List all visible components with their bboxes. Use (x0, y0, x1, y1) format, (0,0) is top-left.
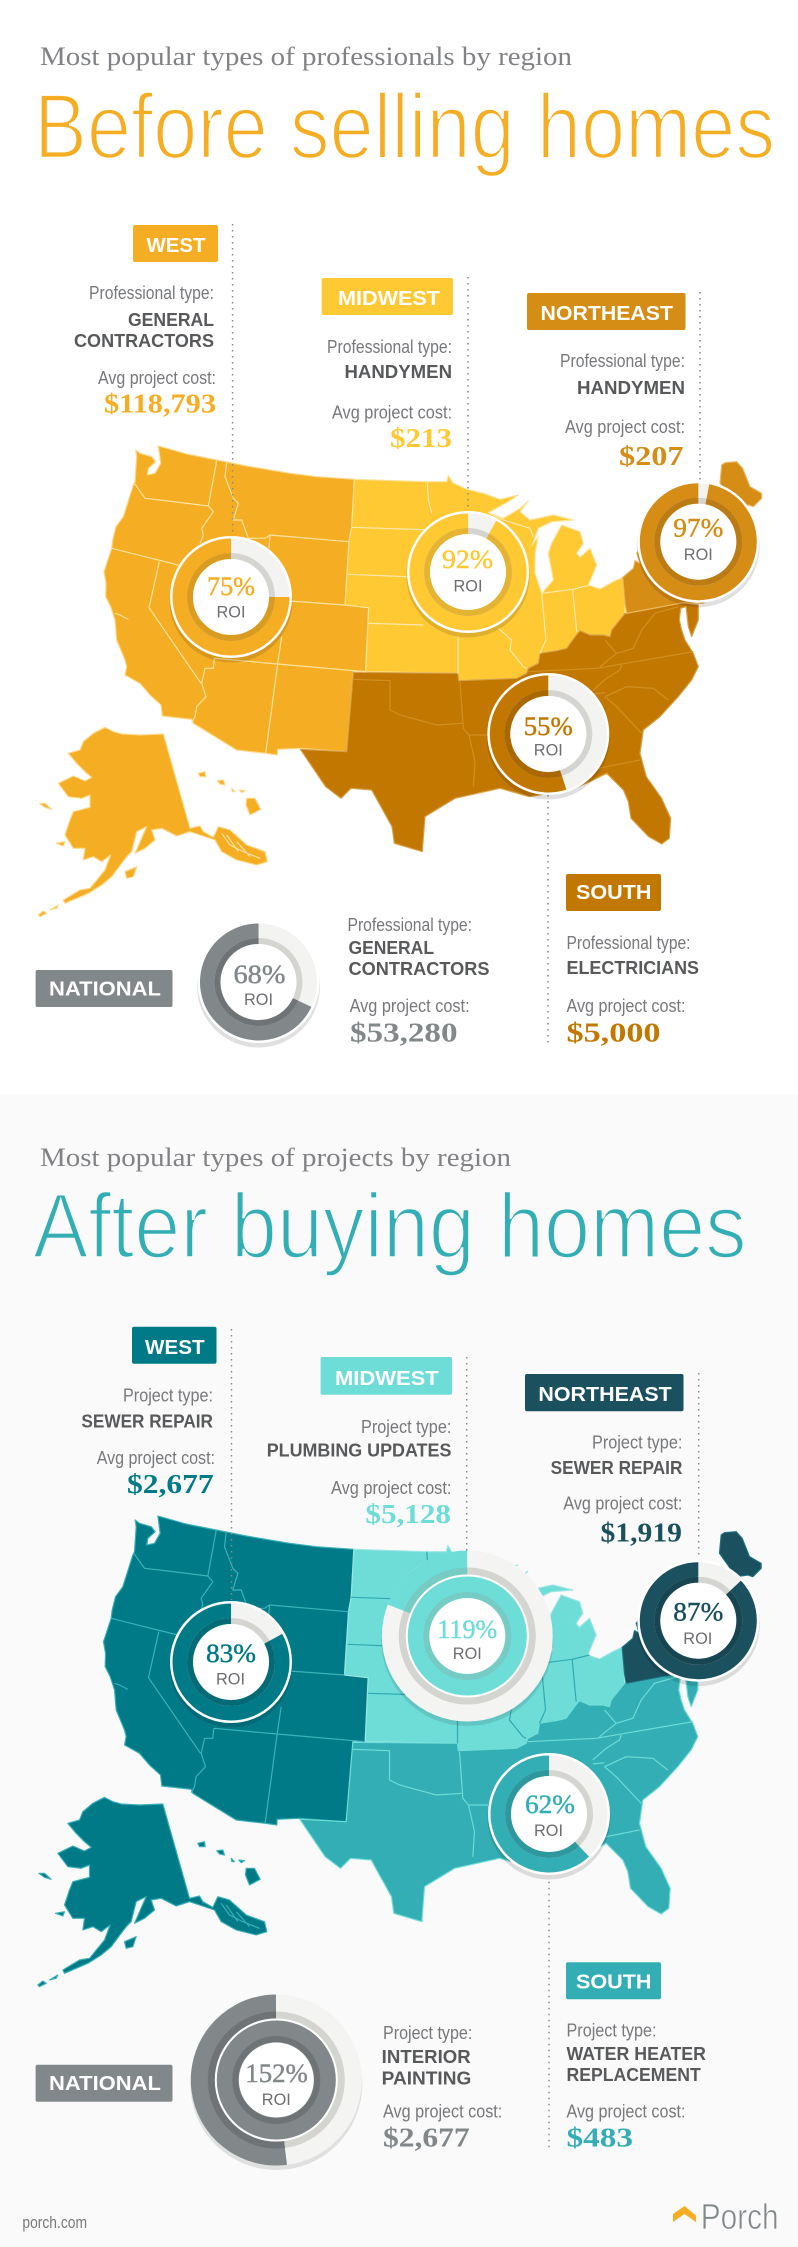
label: west: WEST (145, 1337, 205, 1359)
label: west (132, 1327, 216, 1364)
region block: west: Professional type: (89, 283, 214, 303)
donut: midwest 92% ROI: 92% (442, 545, 493, 574)
donut: national 68% ROI (195, 918, 322, 1048)
region block: midwest: Project type: (361, 1417, 451, 1437)
donut: south 55% ROI (487, 673, 610, 800)
label: west (133, 225, 218, 262)
donut: south 62% ROI: ROI (534, 1821, 563, 1840)
label: national: NATIONAL (49, 979, 161, 1001)
region block: northeast (525, 1374, 684, 1548)
donut: west 83% ROI: ROI (216, 1670, 245, 1689)
label: south: SOUTH (576, 882, 652, 904)
region block: midwest (267, 1357, 452, 1529)
donut: northeast 87% ROI (630, 1553, 766, 1689)
label: northeast: NORTHEAST (538, 1384, 672, 1406)
label: west: WEST (146, 235, 206, 257)
region block: national: $53,280 (350, 1018, 458, 1048)
region block: northeast: $1,919 (600, 1518, 682, 1548)
region block: northeast: Professional type: (560, 351, 685, 371)
region block: midwest: Avg project cost: (332, 402, 452, 422)
donut: national 152% ROI: 152% (245, 2059, 308, 2088)
donut: national 152% ROI: ROI (262, 2090, 291, 2109)
region block: national: GENERAL (348, 937, 434, 958)
region block: west: Project type: (123, 1386, 213, 1406)
label: south (566, 874, 661, 911)
donut: national 68% ROI: ROI (244, 990, 273, 1009)
donut: south 62% ROI: 62% (525, 1790, 575, 1819)
region block: south: ELECTRICIANS (566, 957, 699, 978)
panel: before selling homes (0, 0, 798, 1094)
label: midwest (321, 1357, 452, 1395)
region block: west: CONTRACTORS (74, 330, 214, 351)
region block: south: $483 (566, 2123, 633, 2153)
region block: midwest: Avg project cost: (331, 1478, 451, 1498)
donut: national 152% ROI (190, 1994, 362, 2170)
region block: northeast: Project type: (592, 1432, 682, 1452)
label: national (36, 970, 172, 1007)
region block: northeast: HANDYMEN (577, 377, 685, 398)
region block: west (74, 225, 218, 418)
region block: west: $118,793 (104, 388, 216, 418)
region block: west: GENERAL (128, 309, 214, 330)
region block: northeast (527, 293, 686, 471)
region block: midwest: PLUMBING UPDATES (267, 1440, 451, 1461)
region block: northeast: Avg project cost: (565, 417, 685, 437)
footer: site address: porch.com (22, 2213, 87, 2232)
donut: west 83% ROI (166, 1597, 296, 1728)
region block: northeast: Avg project cost: (563, 1493, 682, 1513)
donut: south 55% ROI: 55% (524, 712, 573, 741)
donut: west 83% ROI: 83% (206, 1639, 256, 1668)
region block: south (566, 1962, 706, 2153)
region block: northeast: SEWER REPAIR (551, 1457, 682, 1478)
donut: midwest 119% ROI (372, 1541, 563, 1731)
region block: national: CONTRACTORS (348, 958, 490, 979)
region block: northeast: $207 (619, 441, 684, 471)
region block: south: WATER HEATER (566, 2043, 706, 2064)
donut: west 75% ROI: ROI (216, 603, 246, 622)
region block: south: Avg project cost: (566, 996, 686, 1016)
region block: national (36, 915, 489, 1048)
region block: midwest: Professional type: (327, 337, 452, 357)
region block: west: Avg project cost: (98, 368, 216, 388)
region block: national (36, 2023, 502, 2153)
logo wordmark: Porch: Porch (701, 2196, 779, 2237)
label: south: SOUTH (576, 1971, 652, 1993)
region block: national: $2,677 (383, 2123, 470, 2153)
region block: national: Avg project cost: (383, 2101, 502, 2121)
region block: midwest: $5,128 (365, 1499, 451, 1529)
region block: west: $2,677 (127, 1469, 214, 1499)
region block: national: INTERIOR (382, 2046, 471, 2067)
region block: national: Project type: (383, 2023, 472, 2043)
region block: national: PAINTING (382, 2067, 471, 2088)
donut: northeast 87% ROI: ROI (683, 1629, 712, 1648)
region block: south: $5,000 (566, 1018, 660, 1048)
donut: south 55% ROI: ROI (534, 741, 563, 760)
donut: midwest 119% ROI: ROI (453, 1644, 482, 1663)
label: national (36, 2065, 172, 2102)
donut: midwest 92% ROI: ROI (454, 577, 482, 596)
donut: northeast 97% ROI (637, 481, 760, 607)
donut: south 62% ROI (481, 1746, 617, 1882)
donut: national 68% ROI: 68% (234, 960, 286, 989)
label: midwest: MIDWEST (335, 1368, 439, 1390)
region block: west: SEWER REPAIR (81, 1410, 213, 1431)
donut: northeast 97% ROI: 97% (673, 514, 723, 543)
donut: west 75% ROI: 75% (207, 572, 255, 601)
map: United States, teal regions (38, 1516, 761, 1987)
donut: northeast 87% ROI: 87% (673, 1598, 723, 1627)
region block: south (566, 874, 699, 1048)
region block: midwest (322, 278, 453, 453)
label: midwest (322, 278, 453, 315)
label: northeast (527, 293, 686, 330)
region block: west: Avg project cost: (97, 1448, 215, 1468)
label: northeast: NORTHEAST (540, 303, 673, 325)
donut: midwest 119% ROI: 119% (437, 1615, 497, 1644)
region block: national: Professional type: (348, 915, 472, 935)
label: northeast (525, 1374, 684, 1411)
region block: national: Avg project cost: (350, 996, 470, 1016)
icon: Porch chevron logo (673, 2206, 696, 2222)
region block: midwest: $213 (390, 423, 452, 453)
subtitle: professionals by region: Most popular types of professionals by region (40, 42, 572, 71)
region block: south: Professional type: (566, 933, 690, 953)
donut: midwest 92% ROI (403, 507, 533, 638)
region block: west (81, 1327, 217, 1499)
region block: midwest: HANDYMEN (344, 361, 452, 382)
region block: south: Project type: (566, 2021, 656, 2041)
panel: after buying homes (0, 1094, 798, 2247)
region block: south: Avg project cost: (566, 2101, 686, 2121)
donut: west 75% ROI (170, 536, 292, 662)
donut: northeast 97% ROI: ROI (684, 545, 713, 564)
label: midwest: MIDWEST (338, 288, 440, 310)
map: United States, amber regions (38, 446, 762, 917)
region block: south: REPLACEMENT (566, 2064, 701, 2085)
label: south (566, 1962, 661, 1999)
label: national: NATIONAL (49, 2073, 161, 2095)
subtitle: projects by region: Most popular types of projects by region (40, 1143, 511, 1172)
